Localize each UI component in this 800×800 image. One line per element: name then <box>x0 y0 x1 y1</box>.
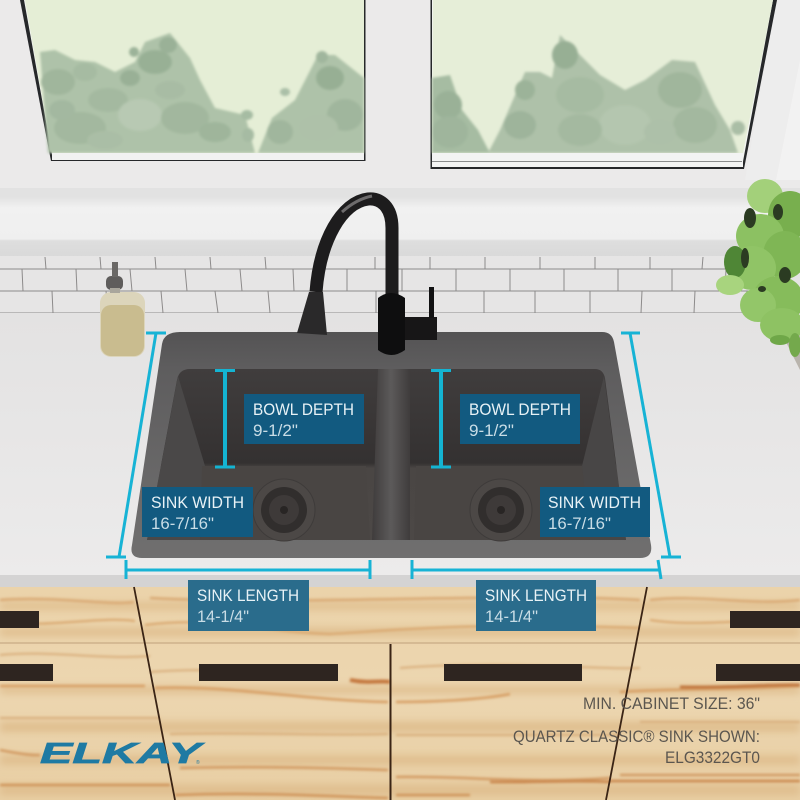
right bowl side wall <box>582 376 626 540</box>
dimension line: left sink width <box>106 333 166 557</box>
label: left sink width: SINK WIDTH <box>151 493 244 512</box>
window: right pane with foliage <box>430 0 777 169</box>
left bowl floor and drain <box>200 466 370 541</box>
sink <box>131 332 651 558</box>
right bowl <box>410 369 626 540</box>
label: left bowl depth <box>244 394 364 444</box>
dimension line: left bowl depth <box>215 370 235 467</box>
label: right sink width: SINK WIDTH <box>548 493 641 512</box>
label: right sink width <box>540 487 650 537</box>
label: right sink length <box>476 580 596 631</box>
label: right bowl depth: 9-1/2" <box>469 421 514 440</box>
label: right sink width: 16-7/16" <box>548 514 611 533</box>
cabinet size and model note <box>513 694 760 767</box>
label: left sink length: SINK LENGTH <box>197 586 299 605</box>
Elkay logo: ® <box>196 759 200 766</box>
label: left sink length: 14-1/4" <box>197 607 249 626</box>
Elkay logo: ELKAY <box>40 738 205 770</box>
label: left sink width <box>142 487 253 537</box>
label: right sink length: SINK LENGTH <box>485 586 587 605</box>
soap bottle <box>100 262 145 357</box>
dimension line: right bowl depth <box>431 370 451 467</box>
label: right sink length: 14-1/4" <box>485 607 538 626</box>
label: right bowl depth <box>460 394 580 444</box>
label: left sink width: 16-7/16" <box>151 514 214 533</box>
cabinets with wood grain <box>0 587 800 800</box>
dimension line: right sink length <box>412 560 661 579</box>
cabinet size and model note: QUARTZ CLASSIC® SINK SHOWN: <box>513 727 760 746</box>
label: left bowl depth: BOWL DEPTH <box>253 400 354 419</box>
cabinet size and model note: ELG3322GT0 <box>665 748 760 767</box>
window sill <box>0 197 800 257</box>
label: left bowl depth: 9-1/2" <box>253 421 298 440</box>
center divider <box>372 369 410 540</box>
Elkay logo <box>40 738 205 770</box>
label: left sink length <box>188 580 309 631</box>
cabinet handles <box>0 611 800 681</box>
window wall and frame <box>0 0 800 197</box>
countertop <box>0 313 800 587</box>
faucet <box>297 196 437 355</box>
subway tile backsplash <box>0 256 800 314</box>
dimension line: left sink length <box>126 560 370 579</box>
cabinet door gaps <box>134 587 647 800</box>
potted plant <box>716 179 800 370</box>
window: left pane with foliage <box>20 0 366 161</box>
left bowl <box>147 369 378 540</box>
left bowl side wall <box>147 376 205 540</box>
dimension line: right sink width <box>621 333 681 557</box>
label: right bowl depth: BOWL DEPTH <box>469 400 571 419</box>
cabinet size and model note: MIN. CABINET SIZE: 36" <box>583 694 760 713</box>
right bowl floor and drain <box>414 466 590 541</box>
